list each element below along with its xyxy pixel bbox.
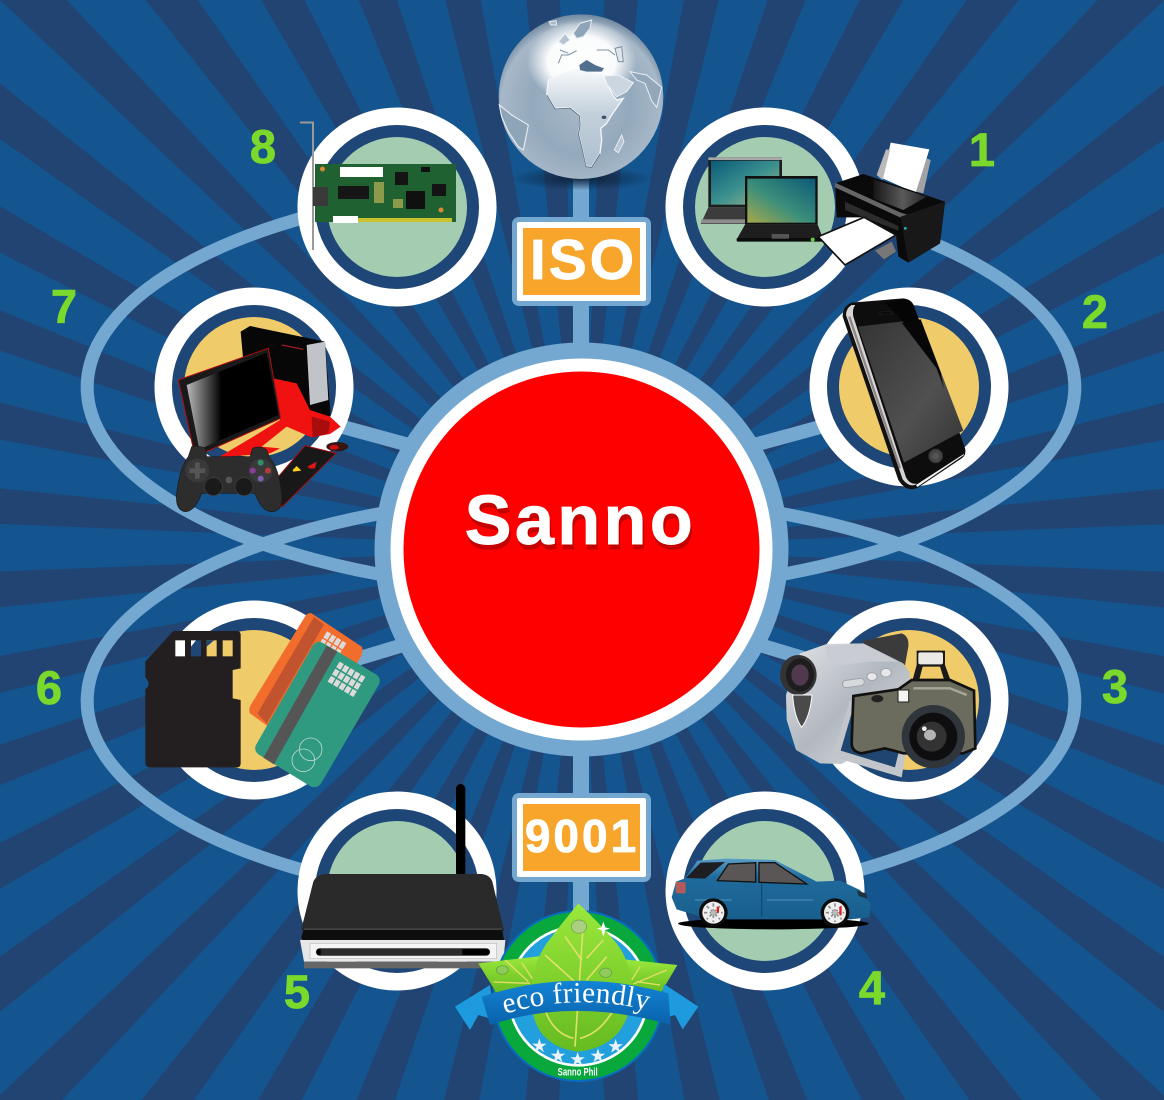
icon: smartphone (843, 298, 965, 489)
green card (255, 642, 380, 787)
SD card (145, 631, 241, 767)
icon: camcorder and photo camera (780, 633, 975, 777)
central hub: Sanno: Sanno (465, 481, 696, 559)
front wheel (821, 898, 849, 927)
stars: ★ (531, 1036, 548, 1057)
icon: laptops and printer (701, 143, 945, 265)
number labels: 6 (36, 661, 62, 714)
icon: silver globe (499, 14, 663, 190)
connector arcs: upper ellipse (87, 197, 1075, 581)
tower (241, 326, 331, 422)
rear wheel (699, 898, 728, 927)
9001 badge: 9001 (525, 810, 639, 862)
stars: ★ (607, 1037, 624, 1058)
stars: ★ (550, 1046, 566, 1067)
icon: gaming PC and controller (176, 326, 348, 512)
seal caption: Sanno Phil (558, 1067, 598, 1079)
camcorder (780, 633, 910, 777)
icon: blue car (672, 859, 871, 929)
keyboard and mouse (278, 442, 348, 507)
front laptop (737, 176, 823, 242)
number labels: 4 (859, 961, 885, 1014)
number labels: 1 (969, 123, 995, 176)
central hub: Sanno: Sanno (466, 486, 698, 564)
icon: network card (300, 122, 456, 250)
ribbon: eco friendly (504, 982, 650, 1014)
number labels: 8 (250, 120, 276, 173)
SD contacts (175, 640, 233, 656)
photo camera (852, 651, 975, 768)
number labels: 7 (51, 280, 77, 333)
game controller (176, 446, 282, 512)
icon: SD card and bank cards (145, 613, 380, 787)
stars (531, 1036, 624, 1070)
device circle 5 (298, 792, 496, 990)
icon: wireless router (300, 784, 505, 968)
stars: ★ (590, 1046, 606, 1067)
9001 badge (512, 793, 651, 882)
seal rings (492, 910, 664, 1082)
leaves (478, 903, 677, 1052)
ISO badge (512, 217, 651, 306)
number labels: 2 (1082, 285, 1108, 338)
device circle 7 (154, 288, 354, 486)
device circle 2 (810, 288, 1008, 486)
stars: ★ (569, 1049, 586, 1070)
number labels: 3 (1102, 660, 1128, 713)
number labels (36, 120, 1128, 1018)
monitor (178, 348, 281, 457)
device circle 4 (666, 792, 864, 990)
ISO badge: ISO (530, 228, 637, 292)
printer (818, 143, 945, 265)
device circle 1 (666, 108, 864, 306)
central hub: Sanno (374, 342, 788, 756)
spokes linking hub to devices (310, 175, 853, 930)
red stand (218, 378, 341, 457)
device circle 6 (154, 600, 354, 800)
device circle 3 (810, 600, 1008, 800)
ribbon (455, 980, 698, 1030)
device circle 8 (298, 108, 496, 306)
icon: eco friendly seal (455, 903, 698, 1082)
orange card (249, 613, 363, 752)
number labels: 5 (284, 965, 310, 1018)
connector arcs: lower ellipse (87, 507, 1075, 891)
back laptop (701, 157, 782, 224)
